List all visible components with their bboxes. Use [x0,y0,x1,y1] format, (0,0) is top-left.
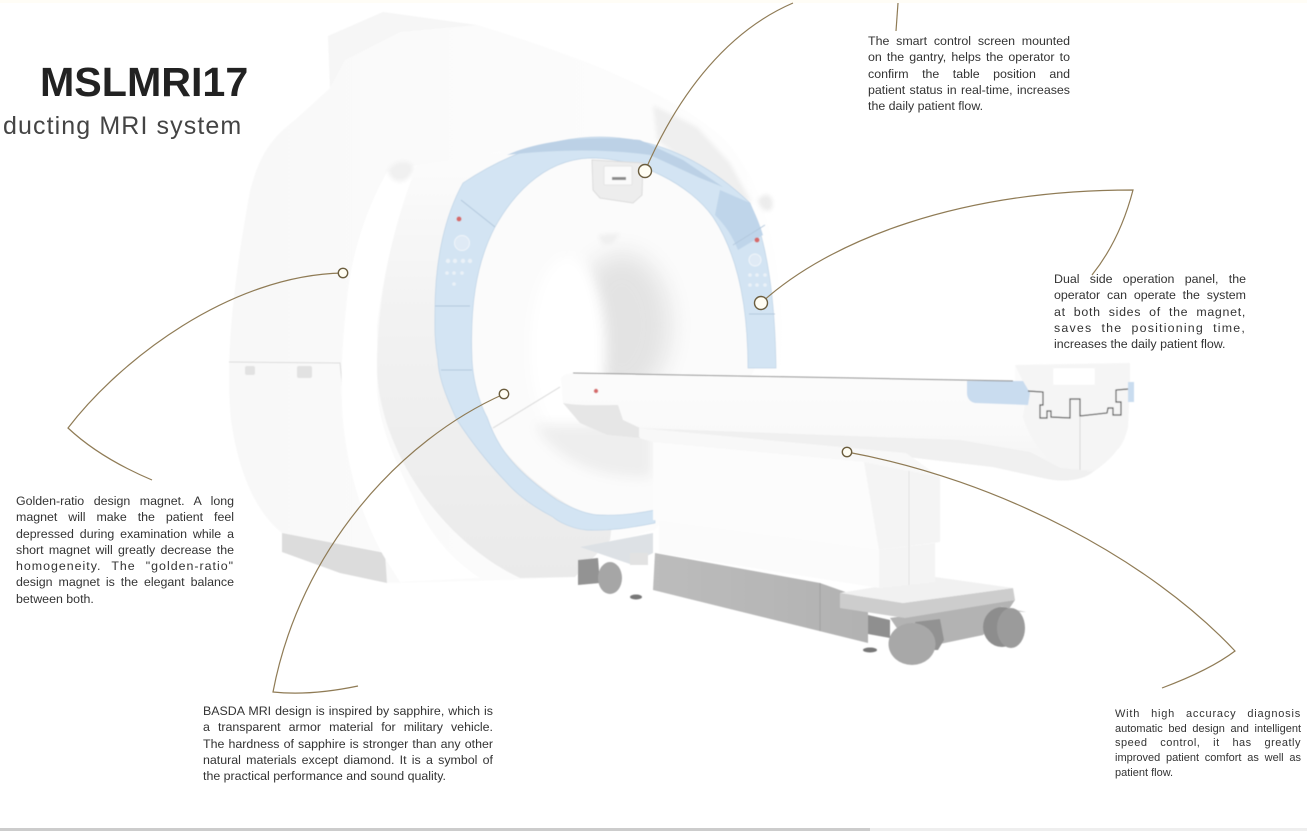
text: control screen [868,34,1070,113]
table top [561,363,1134,480]
text: golden-ratio magnet: magnet will make the patient feel [16,510,234,524]
bore opening [530,256,606,440]
text: dual side operation panel [1054,272,1246,351]
wheel bracket [915,619,944,650]
top housing [328,12,477,88]
right base body [890,600,1015,645]
face seam [493,387,560,428]
text: control screen: on the gantry, helps the operator to [868,50,1070,64]
subtitle: ducting MRI system [3,112,242,140]
bore top sensor [598,233,620,245]
text: dual side operation panel: increases the daily patient flow. [1054,337,1226,351]
inner face of gantry [466,150,755,520]
dark top ring band [507,138,723,187]
gantry screen [592,160,643,203]
left foot [630,594,642,600]
left wheel [598,562,622,594]
left plate block [630,553,648,565]
right control panel [748,238,767,287]
table column [653,442,940,588]
table joint line [1028,389,1128,418]
text: golden-ratio magnet: homogeneity. The "golden-ratio" [16,559,234,573]
text: sapphire design [203,704,493,783]
text: automatic bed: improved patient comfort as well as [1115,752,1301,764]
callout line: sapphire design [273,389,509,693]
long base box [653,553,868,643]
text: automatic bed: automatic bed design and intelligent [1115,723,1301,735]
text: golden-ratio magnet: Golden-ratio design magnet. A long [16,494,234,508]
callout line: automatic bed [842,447,1235,688]
left control panel [445,216,472,286]
text: control screen: The smart control screen mounted [868,34,1070,48]
table underside band [640,428,1093,480]
text: golden-ratio magnet: between both. [16,592,94,606]
left base plate [580,533,653,564]
callout line: operation panel [754,190,1133,310]
bottom bar left [0,828,870,831]
text: control screen: the daily patient flow. [868,99,983,113]
text: dual side operation panel: saves the positioning time, [1054,321,1246,335]
text: dual side operation panel: operator can operate the system [1054,288,1246,302]
text: golden-ratio magnet: short magnet will greatly decrease the [16,543,234,557]
front wheel [888,623,936,665]
table grip [1053,368,1095,385]
table rail [573,373,1013,381]
gantry body [229,12,782,583]
gantry base [282,533,387,583]
text: automatic bed [1115,708,1301,779]
white band around gantry [342,165,480,582]
rear wheel [983,606,1026,648]
gray arc above ring [653,105,752,203]
left knob [388,162,414,182]
patient table base [578,533,1026,665]
front foot [863,648,877,652]
text: sapphire design: the practical performance and sound quality. [203,769,446,783]
side cover latches [245,366,312,378]
bottom bar right [870,828,1307,831]
shaded bowl under table [535,425,652,477]
MRI machine [229,12,1134,665]
title: MSLMRI17 [40,59,248,105]
text: automatic bed: patient flow. [1115,767,1173,779]
right base plate edge [840,588,1015,618]
darker right ring segment [715,190,763,250]
blue table accent [967,381,1030,405]
text: sapphire design: BASDA MRI design is inspired by sapphire, which is [203,704,493,718]
text: dual side operation panel: at both sides of the magnet, [1054,305,1246,319]
text: golden-ratio magnet: design magnet is the elegant balance [16,575,234,589]
text: sapphire design: The hardness of sapphire is stronger than any other [203,737,493,751]
text: sapphire design: a transparent armor material for military vehicle. [203,720,493,734]
column lip [639,428,940,477]
table indicator [594,389,598,393]
blue ring [435,137,776,530]
text: automatic bed: speed control, it has greatly [1115,737,1301,749]
text: golden-ratio magnet [16,494,234,606]
callout tick: control screen text [896,3,898,31]
text: dual side operation panel: Dual side operation panel, the [1054,272,1246,286]
text: control screen: confirm the table position and [868,67,1070,81]
table left underside shading [563,403,640,438]
bracket [868,615,890,638]
blue end accent [1128,382,1134,402]
right base plate top [840,577,1013,603]
callout line: magnet [68,268,348,480]
text: control screen: patient status in real-time, increases [868,83,1070,97]
text: automatic bed: With high accuracy diagnosis [1115,708,1301,720]
left bracket [578,558,600,585]
front face of gantry [377,150,640,578]
text: sapphire design: natural materials except diamond. It is a symbol of [203,753,493,767]
callout line: control screen [638,3,793,178]
table end cap [1015,363,1130,470]
right knob [758,195,773,211]
text: golden-ratio magnet: depressed during examination while a [16,527,234,541]
side cover seam [229,362,347,430]
bore shadow [574,253,670,397]
